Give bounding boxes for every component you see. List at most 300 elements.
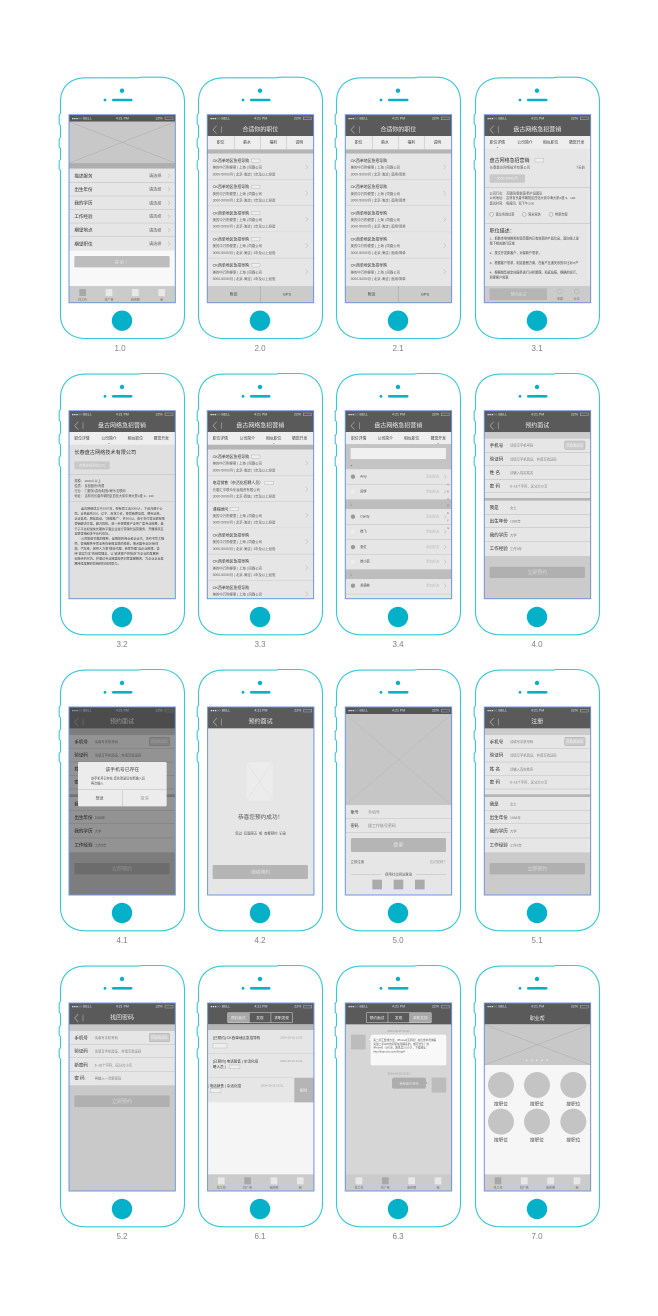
login button <box>351 838 446 852</box>
contact list: 添加好友 <box>426 583 440 588</box>
job row: CK西单地区急招导购 <box>213 559 249 564</box>
job row: 美的中万购便里 | 上海 | 同路公司 <box>213 565 262 570</box>
alphabet index <box>447 484 449 530</box>
status bar and nav: 22% <box>294 412 301 416</box>
alert dialog: 该手机号已存在 <box>105 766 139 773</box>
alphabet index: E <box>447 513 449 515</box>
contact list: 添加好友 <box>426 514 440 519</box>
job row: 3000-5000/月 | 北京-海淀 | 面用/简单 <box>351 171 406 176</box>
status bar and nav: 盘古网络急招营销 <box>98 421 146 429</box>
received message: iPhone6（16GB，通讯员2.0.0.0），下载地址： <box>373 1046 429 1050</box>
job row: 3000-5000/月 | 北京-海淀 | 1年及以上经验 <box>213 546 276 551</box>
job row clipped: 美的中万购便里 | 上海 | 同路公司 <box>213 592 262 597</box>
received message <box>369 1035 446 1065</box>
grey band <box>69 794 175 797</box>
job description: 4、根据销售部定向服务进行分析整理，和返站稿，根据的运行， <box>490 270 579 275</box>
account form: 手机号 <box>74 738 88 745</box>
profile form <box>484 501 591 556</box>
contact list: 添加好友 <box>426 559 440 564</box>
account form: 获取验证码 <box>566 739 584 744</box>
tab bar <box>484 1174 591 1191</box>
contact list: 郑德林 <box>360 583 371 588</box>
profile form: 出生年份 <box>490 814 508 821</box>
version label: 7.0 <box>531 1232 543 1241</box>
login fields: 密码 <box>351 822 359 828</box>
benefit labels: 宽业务岗位薪 <box>496 211 514 216</box>
detail tabs: 相似职位 <box>543 140 558 145</box>
job row <box>345 232 452 258</box>
detail tabs: 猜您开发 <box>569 140 584 145</box>
status bar and nav: 4:21 PM <box>254 1005 268 1009</box>
chat background <box>345 1003 452 1191</box>
screen border <box>207 411 314 599</box>
job row: 3000-5000/月 | 北京-海淀 | 面用/简单 <box>351 198 406 203</box>
phone frame <box>335 966 460 1227</box>
screen 3.1 <box>484 115 591 303</box>
account form <box>484 439 591 498</box>
screen border <box>69 707 175 895</box>
job row: 3000-5000/月 | 北京-海淀 | 1年及以上经验 <box>213 171 276 176</box>
company description: 盘古网络成立于2007年，现有员工近2000人，下设沟通子公 <box>81 505 162 510</box>
version label: 4.1 <box>116 936 128 945</box>
tab bar <box>208 1174 314 1191</box>
status bar and nav <box>484 707 591 728</box>
profile form: 出生年份 <box>74 814 93 821</box>
job row: CK西单地区急招导购 <box>213 184 249 189</box>
bottom bar: GPS <box>283 293 291 297</box>
job row: 3000-5000/月 | 北京-海淀 | 面用/简单 <box>351 276 406 281</box>
profile form: 我是 <box>490 504 499 511</box>
version label: 2.0 <box>254 344 266 353</box>
job row: CK西单地区急招导购 <box>213 210 249 215</box>
status bar and nav: ●●●○○ BELL <box>487 709 507 713</box>
alphabet index: G <box>447 528 449 530</box>
screen border <box>345 115 452 303</box>
phone 3.2 <box>59 374 185 649</box>
category labels: 搜职位 <box>494 1100 508 1107</box>
profile form: 女士 <box>510 505 517 510</box>
status bar and nav: 合适你的职位 <box>380 125 416 133</box>
account form: 请输入真实姓名 <box>510 766 533 771</box>
screen border <box>484 411 591 599</box>
submit button: 立即预约 <box>527 865 547 872</box>
job row <box>345 258 452 286</box>
filter tabs: 福利 <box>269 140 277 145</box>
profile form: 工作经验 <box>74 841 93 848</box>
company description: 观、汽车库，提供人力客"微信代理、商家管理"自企业规律。坚 <box>74 546 160 551</box>
status bar: 4:21 PM <box>116 116 129 120</box>
company description <box>74 505 165 566</box>
option list: 请选择 <box>149 213 162 219</box>
follow-up links: 您过 后面周五 或 查看预约 记录 <box>235 830 287 835</box>
phone frame <box>59 966 185 1227</box>
status bar and nav: ●●●○○ BELL <box>210 412 230 416</box>
job row: 美的中万购便里 | 上海 | 同路公司 <box>213 243 262 248</box>
contact list: 同学 <box>360 489 367 494</box>
sent message: 我有疑问-咨询 <box>400 1080 418 1085</box>
search area: # <box>351 463 353 467</box>
status bar and nav: 4:21 PM <box>116 709 129 713</box>
job row: 3000-5000/月 | 北京-西城 | 1年及以上经验 <box>213 494 276 499</box>
version label: 5.0 <box>392 936 404 945</box>
category labels: 搜职位 <box>566 1137 581 1144</box>
status bar and nav: 22% <box>294 116 301 120</box>
company facts <box>74 478 154 498</box>
phone 5.1 <box>474 670 600 945</box>
job row: 美的中万购便里 | 上海 | 同路公司 <box>351 165 400 170</box>
bottom bar <box>345 286 452 303</box>
phone 3.4 <box>335 374 460 649</box>
company description: 公司旗前节推的服务，是把提的商业和企业代，关约书写工程 <box>81 536 164 541</box>
job row: CK西单地区急招导购 <box>351 184 387 189</box>
option list: 请选择 <box>149 240 162 246</box>
status bar and nav: 4:21 PM <box>392 116 405 120</box>
status bar and nav: 22% <box>156 709 163 713</box>
social login divider: 使用社交网站登录 <box>385 872 413 877</box>
contact list: 添加好友 <box>426 474 440 479</box>
job row <box>345 180 452 206</box>
profile form: 工作经验 <box>490 841 508 848</box>
option list: 请选择 <box>149 186 162 192</box>
reset form: 新密码 <box>74 1061 88 1068</box>
status bar and nav: 4:21 PM <box>254 116 267 120</box>
version label: 6.1 <box>254 1232 266 1241</box>
segmented control: 预约面试 <box>231 1015 246 1020</box>
alert dialog: 取消 <box>141 794 149 800</box>
phone 6.1 <box>197 966 322 1241</box>
version label: 4.0 <box>531 640 543 649</box>
account form: 密 码 <box>74 779 85 786</box>
detail tabs: 职位详情 <box>74 436 90 441</box>
screen border <box>69 115 175 303</box>
status bar: ●●●○○ BELL <box>348 709 368 713</box>
phone frame <box>474 77 600 338</box>
status bar and nav: 4:21 PM <box>254 412 267 416</box>
phone 7.0 <box>474 966 600 1241</box>
status bar and nav: 22% <box>432 412 439 416</box>
phone frame <box>59 77 185 338</box>
version label: 1.0 <box>114 344 126 353</box>
reset form: 密 码 <box>74 1075 85 1082</box>
sent message <box>392 1078 428 1089</box>
alphabet index: C <box>447 499 449 501</box>
tab bar: 找广告 <box>243 1185 252 1190</box>
status bar and nav: 盘古网络急招营销 <box>513 125 561 133</box>
screen border <box>484 115 591 303</box>
version label: 3.4 <box>392 640 404 649</box>
job row <box>345 206 452 232</box>
status bar and nav <box>484 115 591 136</box>
grey band <box>69 163 175 169</box>
profile form <box>69 797 175 852</box>
filter tabs: 说明 <box>295 140 303 145</box>
profile form: 我是 <box>490 800 499 807</box>
status bar and nav: 盘古网络急招营销 <box>374 421 422 429</box>
job row: 美的中万购便里 | 上海 | 同路公司 <box>351 217 400 222</box>
status bar and nav: ●●●○○ BELL <box>72 709 92 713</box>
version label: 5.1 <box>531 936 543 945</box>
profile form <box>484 797 591 852</box>
job description: 2、按文开发新客户，对接新户需求； <box>490 250 541 255</box>
segmented control <box>366 1013 431 1023</box>
contact list: L <box>351 572 353 576</box>
submit button <box>490 567 585 578</box>
status bar and nav: 职业帮 <box>530 1015 545 1022</box>
filter tabs: 职位 <box>217 140 225 145</box>
status bar and nav: ●●●○○ BELL <box>72 412 92 416</box>
phone frame <box>197 374 322 635</box>
phone frame <box>197 670 322 931</box>
status bar and nav: 4:21 PM <box>531 116 544 120</box>
phone frame <box>474 670 600 931</box>
tab bar: 我 <box>160 296 163 301</box>
account form: 密 码 <box>490 779 500 786</box>
contact list: 添加好友 <box>426 544 440 549</box>
job row <box>207 554 314 580</box>
job row clipped <box>207 581 314 599</box>
reservation row: [已预约] 电话销售 | 杂活化招 <box>213 1059 259 1064</box>
grey band <box>207 149 314 154</box>
reservation row: 2014-10-15 12:21 <box>280 1059 303 1063</box>
status bar and nav <box>484 1003 591 1024</box>
job heading <box>490 157 586 170</box>
reservation row: 2014-10-15 12:21 <box>280 1035 303 1039</box>
tab bar: 我的圈 <box>407 1185 416 1190</box>
received message: 清二手汇要成方法，iPhone6无手机！在包含中查询看 <box>373 1038 437 1042</box>
tab bar: 找广告 <box>381 1185 390 1190</box>
detail tabs <box>69 432 175 445</box>
company description: 持"诚实为本"的经营理念，以"追求客户的情感"为企业的发展目 <box>74 551 159 556</box>
screen 6.3 <box>345 1003 452 1191</box>
job description: 职位描述： <box>490 228 515 235</box>
screen border <box>69 1003 175 1191</box>
job description: 3、根据客户需求，制定套餐方案，在客户互通关系的中比对IT户 <box>490 260 579 265</box>
job row <box>207 450 314 476</box>
job row: 美的中万购便里 | 上海 | 同路公司 <box>213 269 262 274</box>
tab bar: 我的圈 <box>269 1185 278 1190</box>
account form: 手机号 <box>490 738 504 745</box>
screen 4.2 <box>208 707 314 895</box>
job row: 美的中万购便里 | 上海 | 同路公司 <box>351 191 400 196</box>
phone frame <box>474 374 600 635</box>
account form: 请填写手机号码 <box>95 739 119 744</box>
status bar and nav: 4:21 PM <box>531 709 544 713</box>
tab bar: 找工作 <box>354 1185 363 1190</box>
job row: 长春汇中联众化妆融资有限公司 <box>213 487 260 492</box>
phone frame <box>474 966 600 1227</box>
profile form: 我的学历 <box>74 828 93 835</box>
phone frame <box>335 77 460 338</box>
phone frame <box>59 374 185 635</box>
profile form: 我是 <box>74 800 84 807</box>
swiped row with delete <box>208 1078 314 1102</box>
detail tabs: 相似职位 <box>128 436 143 441</box>
screen 5.0 <box>345 707 452 895</box>
job row: 3000-5000/月 | 北京-海淀 | 1年及以上经验 <box>213 520 276 525</box>
contact list <box>345 469 452 599</box>
job row <box>207 154 314 180</box>
option list: 工作经验 <box>74 213 93 220</box>
job row: 3000-5000/月 | 北京-海淀 | 1年及以上经验 <box>213 276 276 281</box>
benefit labels <box>496 211 568 216</box>
login fields: 手机号 <box>368 808 380 814</box>
filter tabs <box>345 136 452 149</box>
segmented control: 预约面试 <box>370 1015 385 1020</box>
login button: 登录 <box>393 842 403 849</box>
company button: 查看在招职位(10) <box>79 462 105 467</box>
alert dialog: 再次输入 <box>91 780 103 785</box>
tab bar <box>345 1174 452 1191</box>
detail tabs <box>207 432 314 445</box>
job row <box>207 180 314 206</box>
tab bar: 我 <box>575 1185 578 1190</box>
status bar and nav <box>207 115 314 136</box>
contact list: Amy <box>360 475 367 479</box>
status bar and nav: ●●●○○ BELL <box>487 1005 507 1009</box>
company description: 展持续发展的营销的科技的助力。 <box>74 561 121 566</box>
phone 2.0 <box>197 77 322 353</box>
company description: 互联营销和多平台代充队。 <box>74 531 111 536</box>
job row: CK西单地区急招导购 <box>213 533 249 538</box>
job row: 美的中万购便里 | 上海 | 同路公司 <box>213 513 262 518</box>
company button <box>74 461 110 469</box>
segmented control: 求职发现 <box>413 1015 428 1020</box>
screen border <box>345 1003 452 1191</box>
category labels: 搜职位 <box>494 1137 508 1144</box>
category labels <box>494 1100 581 1144</box>
phone 4.1 <box>59 670 185 945</box>
continue button: 继续预约 <box>251 869 270 876</box>
status bar and nav: 22% <box>294 709 301 713</box>
screen border <box>208 707 314 895</box>
profile form: 工作3年 <box>95 842 107 847</box>
filter tabs: 福利 <box>407 140 415 145</box>
version label: 3.2 <box>116 640 128 649</box>
phone 4.0 <box>474 374 600 649</box>
profile form: 工作经验 <box>490 545 508 552</box>
action bar: 收藏 <box>557 295 563 300</box>
filter tabs: 说明 <box>433 140 441 145</box>
status bar and nav: 22% <box>294 1005 301 1009</box>
reservation row: [已预约] CK西单地区急招导购 <box>213 1035 261 1040</box>
status bar and nav: 预约面试 <box>110 718 134 726</box>
job row: 3000-5000/月 | 北京-海淀 | 面用/简单 <box>351 250 406 255</box>
benefit checks <box>490 212 553 216</box>
alert dialog: 登录 <box>96 794 104 800</box>
reservation row <box>208 1030 314 1054</box>
option list: 期望职位 <box>74 240 93 247</box>
tab bar <box>69 286 175 303</box>
white area <box>69 251 175 286</box>
content background <box>69 411 175 599</box>
contact list: 添加好友 <box>426 489 440 494</box>
continue button <box>213 865 308 879</box>
status bar and nav: 4:21 PM <box>392 1005 405 1009</box>
swiped row with delete: 2014-10-15 12:21 <box>261 1083 284 1087</box>
grey band <box>484 498 591 501</box>
job row: 3000-5000/月 | 北京-海淀 | 1年及以上经验 <box>213 572 276 577</box>
screen 2.1 <box>345 115 452 303</box>
detail tabs: 猜您开发 <box>154 436 169 441</box>
status bar and nav: ●●●○○ BELL <box>210 709 230 713</box>
screen background <box>208 1003 314 1191</box>
grey band <box>345 149 452 154</box>
action bar: 预约面试 <box>510 290 526 296</box>
submit button: 立即预约 <box>527 569 547 576</box>
social login divider <box>351 872 446 877</box>
status bar and nav: 预约面试 <box>525 421 549 429</box>
phone frame <box>59 670 185 931</box>
company facts: 行业： 门服务/游戏/制造/海外/互联网 <box>74 488 126 493</box>
filter tabs: 薪水 <box>381 140 389 145</box>
screen border <box>484 707 591 895</box>
company facts: 地址： 吉林省长春市朝阳区四化大街中海大厦A座 9、10F <box>74 493 154 498</box>
company facts: 公司行业： 互联网/新能源/新产品团队 <box>490 191 543 196</box>
detail tabs: 公司简介 <box>378 436 393 441</box>
job row <box>207 528 314 554</box>
contact list: 徐飞 <box>360 529 367 534</box>
content background <box>208 707 314 895</box>
account form: 获取验证码 <box>566 442 584 447</box>
submit button <box>490 863 585 874</box>
phone 6.3 <box>335 966 460 1241</box>
screen 7.0 <box>484 1003 591 1191</box>
social icons <box>372 880 425 889</box>
submit button: 立即预约 <box>112 1098 132 1105</box>
tab bar: 找工作 <box>217 1185 226 1190</box>
benefit labels: 带薪年假 <box>555 211 568 216</box>
status bar and nav <box>69 707 175 728</box>
grey band <box>208 1024 314 1030</box>
filter tabs <box>207 136 314 149</box>
segmented control <box>228 1013 293 1023</box>
status bar and nav: ●●●○○ BELL <box>348 412 368 416</box>
job description <box>490 228 579 280</box>
segmented control: 求职发现 <box>274 1015 289 1020</box>
status bar and nav: 22% <box>432 116 439 120</box>
register links: 立即注册 <box>351 859 365 864</box>
tab bar: 找广告 <box>105 296 113 301</box>
profile form: 女士 <box>510 801 517 806</box>
register links <box>351 859 447 864</box>
content background <box>484 1003 591 1191</box>
job row: 美的中万购便里 | 上海 | 同路公司 <box>213 539 262 544</box>
status bar and nav: 4:21 PM <box>392 412 405 416</box>
login fields <box>345 808 452 832</box>
profile form: 我的学历 <box>490 828 508 835</box>
profile form: 工作3年 <box>510 842 522 847</box>
job row: CK西单地区急招导购 <box>351 237 387 242</box>
account form: 请填写手机号码 <box>510 443 534 448</box>
job row: 美的中万购便里 | 上海 | 同路公司 <box>213 191 262 196</box>
image placeholder <box>69 122 175 163</box>
reset form: 验证码 <box>74 1048 88 1055</box>
status bar and nav: ●●●○○ BELL <box>348 116 368 120</box>
detail tabs: 职位详情 <box>490 140 505 145</box>
status bar and nav <box>69 411 175 432</box>
phone 1.0 <box>59 77 185 353</box>
reset form: 再输入一次新密码 <box>95 1076 122 1081</box>
job row: 3000-5000/月 | 北京-海淀 | 1年及以上经验 <box>213 467 276 472</box>
detail tabs: 职位详情 <box>351 436 366 441</box>
screen 3.2 <box>69 411 175 599</box>
received message: 清加二手APP的问答加强联系的，或打给生！用 <box>373 1042 429 1046</box>
company facts: 性质： 民营股份/有限 <box>74 483 105 488</box>
account form <box>69 735 175 794</box>
grey band <box>484 794 591 797</box>
job row: 3000-5000/月 | 北京-海淀 | 1年及以上经验 <box>213 224 276 229</box>
account form: 姓 名 <box>74 765 85 772</box>
